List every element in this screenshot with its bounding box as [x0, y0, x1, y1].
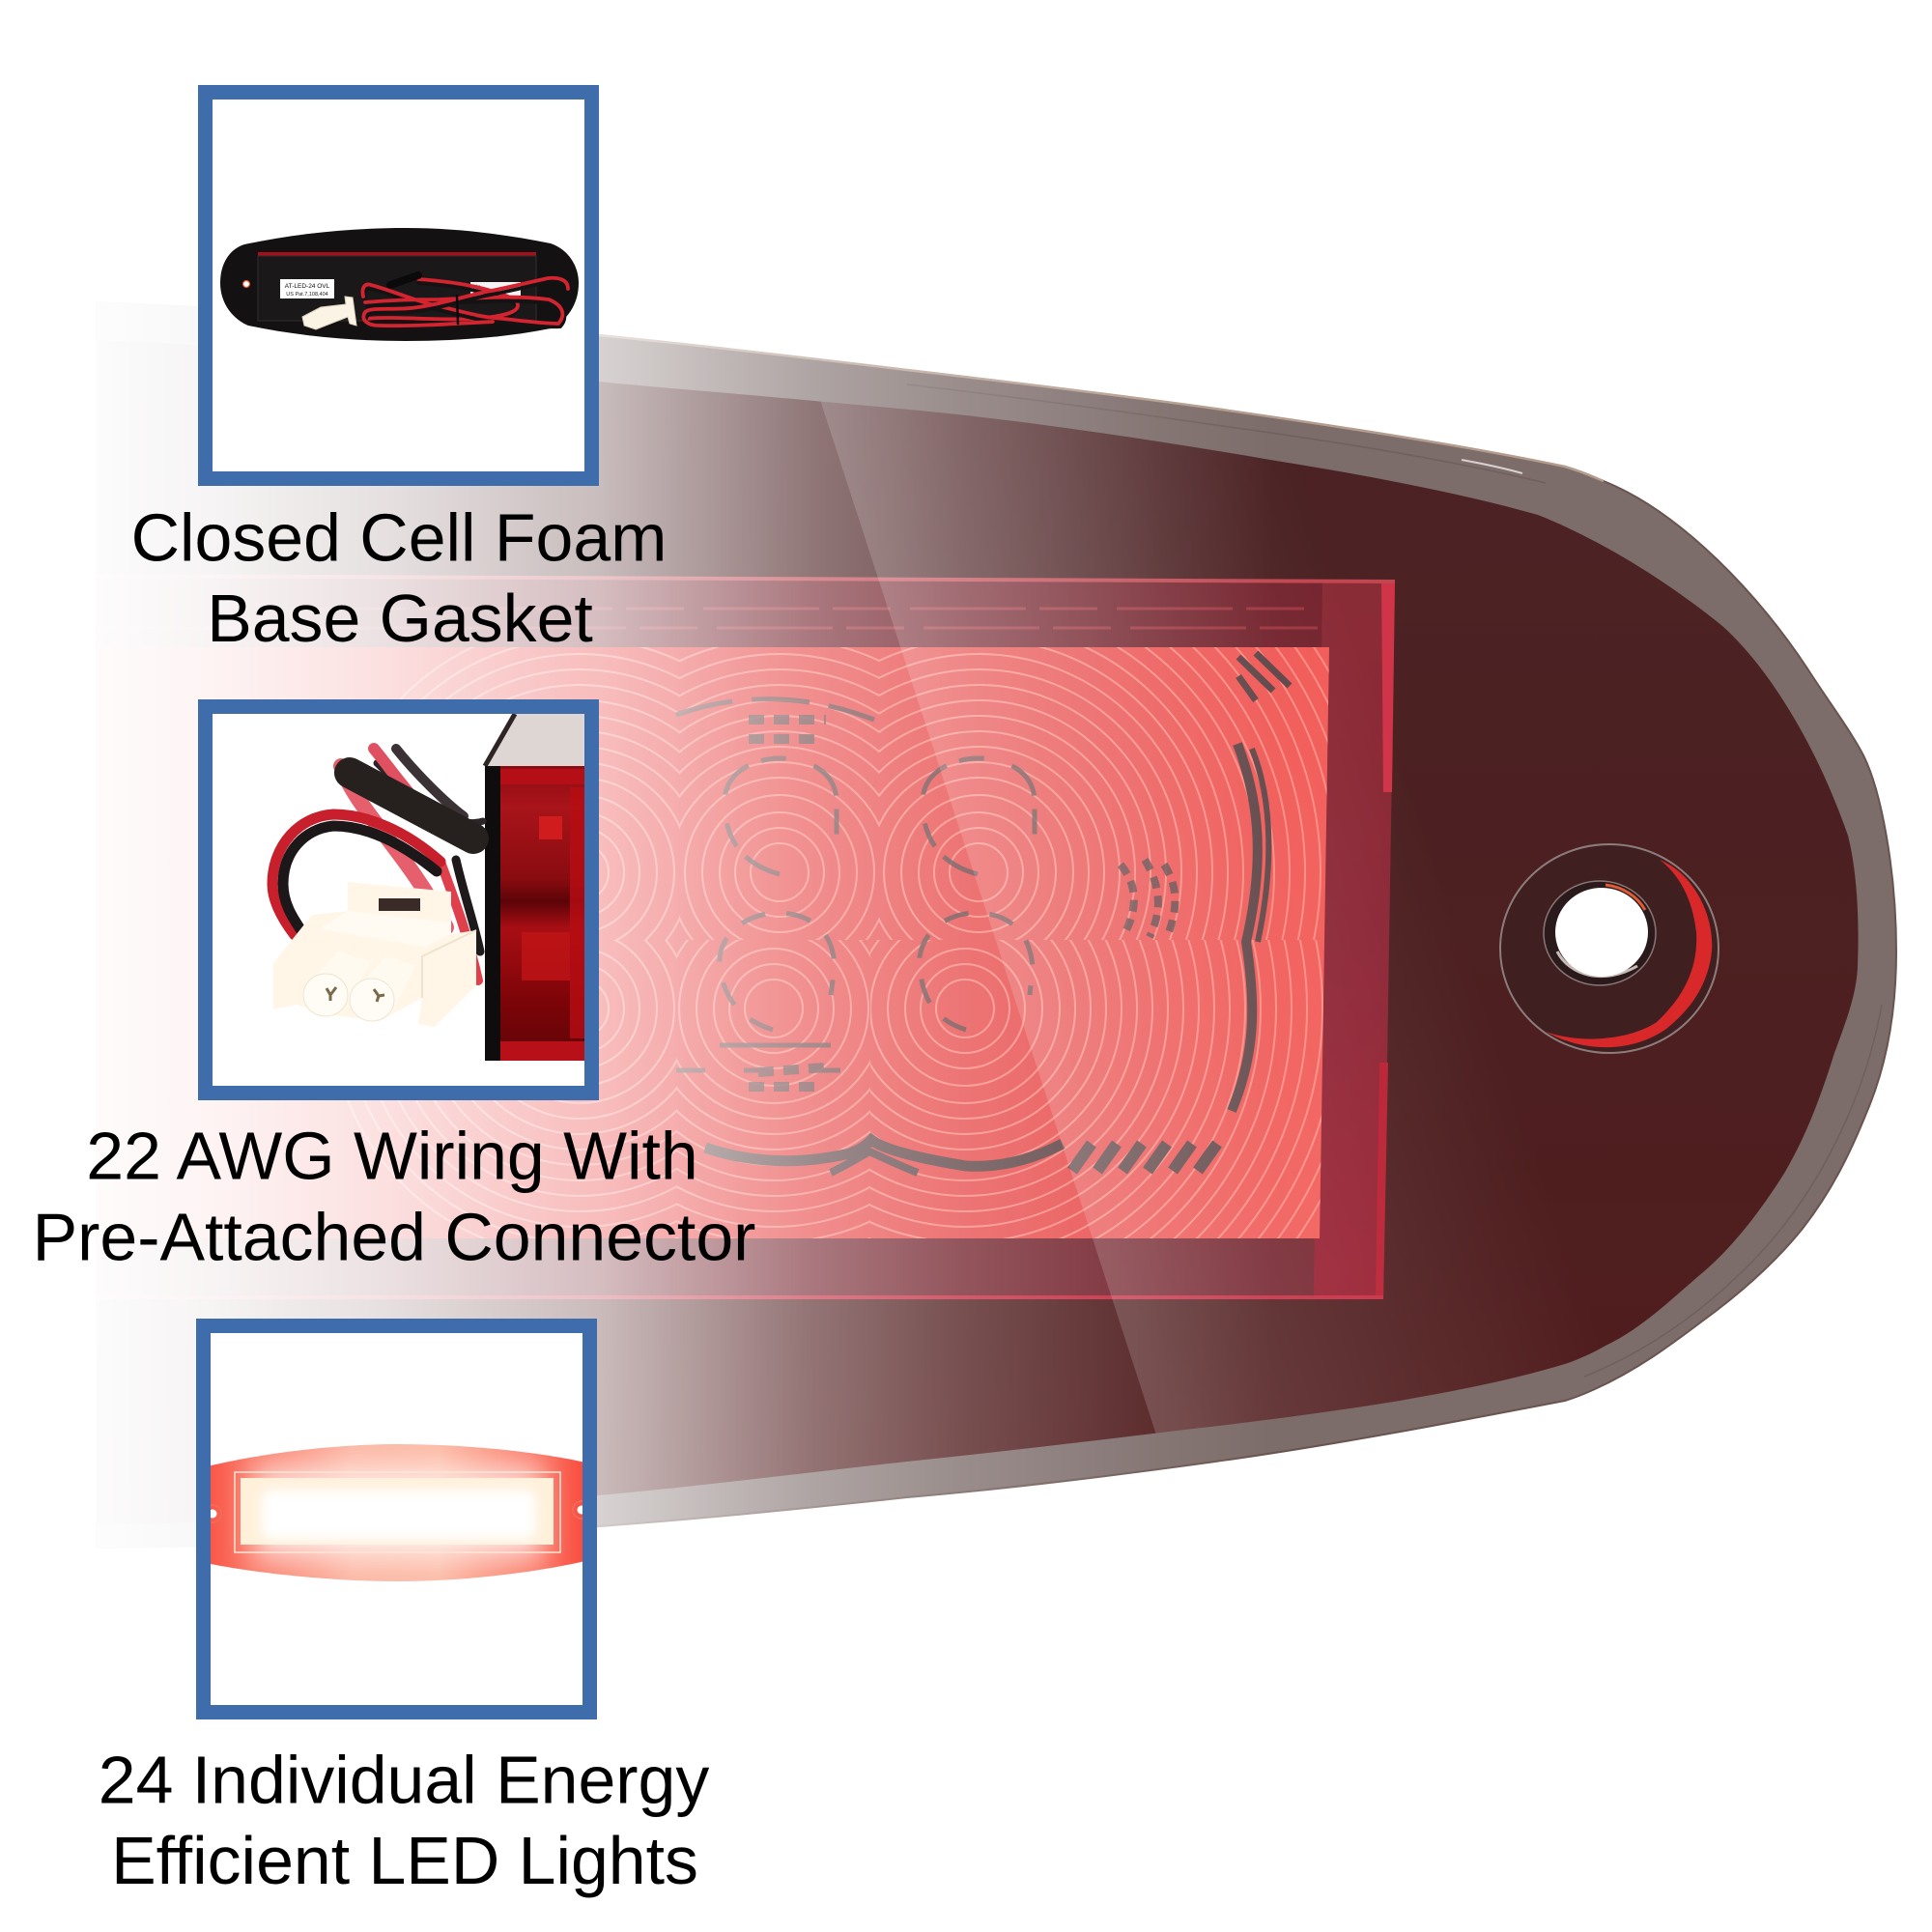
- grommet and wire tie: [390, 275, 458, 324]
- dark LED shadow arcs: [676, 699, 1175, 1087]
- light housing top: [485, 714, 584, 766]
- panel: wiring and connector: [205, 707, 591, 1094]
- red and black wire loop: [272, 814, 440, 935]
- white gradient fade over the left of the lamp: [95, 290, 1275, 1557]
- red lens block: [485, 766, 584, 1061]
- heading: 24 individual LEDs: Efficient LED Lights: [111, 1823, 698, 1898]
- dark curved bands on lens: [705, 653, 1290, 1173]
- second label: [470, 282, 521, 298]
- background pink wire bundle: [341, 749, 483, 980]
- soft white glow: [253, 1466, 543, 1559]
- bright lens panel with concentric rings: [255, 647, 1329, 1238]
- thin inner frame: [235, 1472, 560, 1552]
- glowing lamp: [193, 1444, 590, 1581]
- product label: AT-LED-24 OVL: [285, 283, 330, 290]
- white connector: [273, 882, 476, 1027]
- back plate: [258, 256, 536, 321]
- heading: 22 AWG wiring: [33, 1119, 755, 1275]
- lip highlight strokes: [599, 335, 1882, 1377]
- frame: [205, 707, 591, 1094]
- heading: closed cell foam base gasket: Closed Cell Foam: [131, 500, 667, 576]
- frame: [203, 1325, 589, 1712]
- white connector: [302, 297, 356, 329]
- lamp outer clear lip: [97, 302, 1896, 1548]
- second label: No.: [473, 285, 483, 291]
- mounting hole: [1500, 844, 1719, 1053]
- heading: 22 AWG wiring: Pre-Attached Connector: [33, 1200, 755, 1275]
- panel: closed cell foam gasket: [205, 93, 591, 479]
- panel: illuminated LEDs: [193, 1325, 590, 1712]
- left and right mount holes: [204, 1501, 590, 1522]
- main product: red LED oval light fading to white on the left: [95, 290, 1896, 1557]
- frame: [205, 93, 591, 479]
- heading: closed cell foam base gasket: [131, 500, 667, 656]
- glossy diagonal reflection: [821, 402, 1508, 1434]
- red glowing body: [193, 1444, 589, 1581]
- white LED core: [261, 1490, 536, 1540]
- red lens edge: [258, 252, 536, 256]
- lens outer frame: [97, 574, 1395, 1299]
- coiled wires: [362, 278, 570, 329]
- heading: 22 AWG wiring: 22 AWG Wiring With: [86, 1119, 698, 1194]
- heading: 24 individual LEDs: [99, 1743, 709, 1898]
- lamp dark red face: [97, 340, 1859, 1524]
- product label: [280, 279, 334, 298]
- heading: closed cell foam base gasket: Base Gasket: [207, 581, 593, 656]
- product label: US Pat.7,108,404: [286, 292, 328, 298]
- black sleeve: [350, 773, 473, 838]
- heading: 24 individual LEDs: 24 Individual Energy: [99, 1743, 709, 1818]
- mounting hole small: [243, 280, 249, 288]
- lens panel: [241, 1478, 554, 1545]
- gasket oval: [220, 228, 579, 341]
- second label: MA: [473, 292, 482, 298]
- wires and block image area: [272, 714, 584, 1061]
